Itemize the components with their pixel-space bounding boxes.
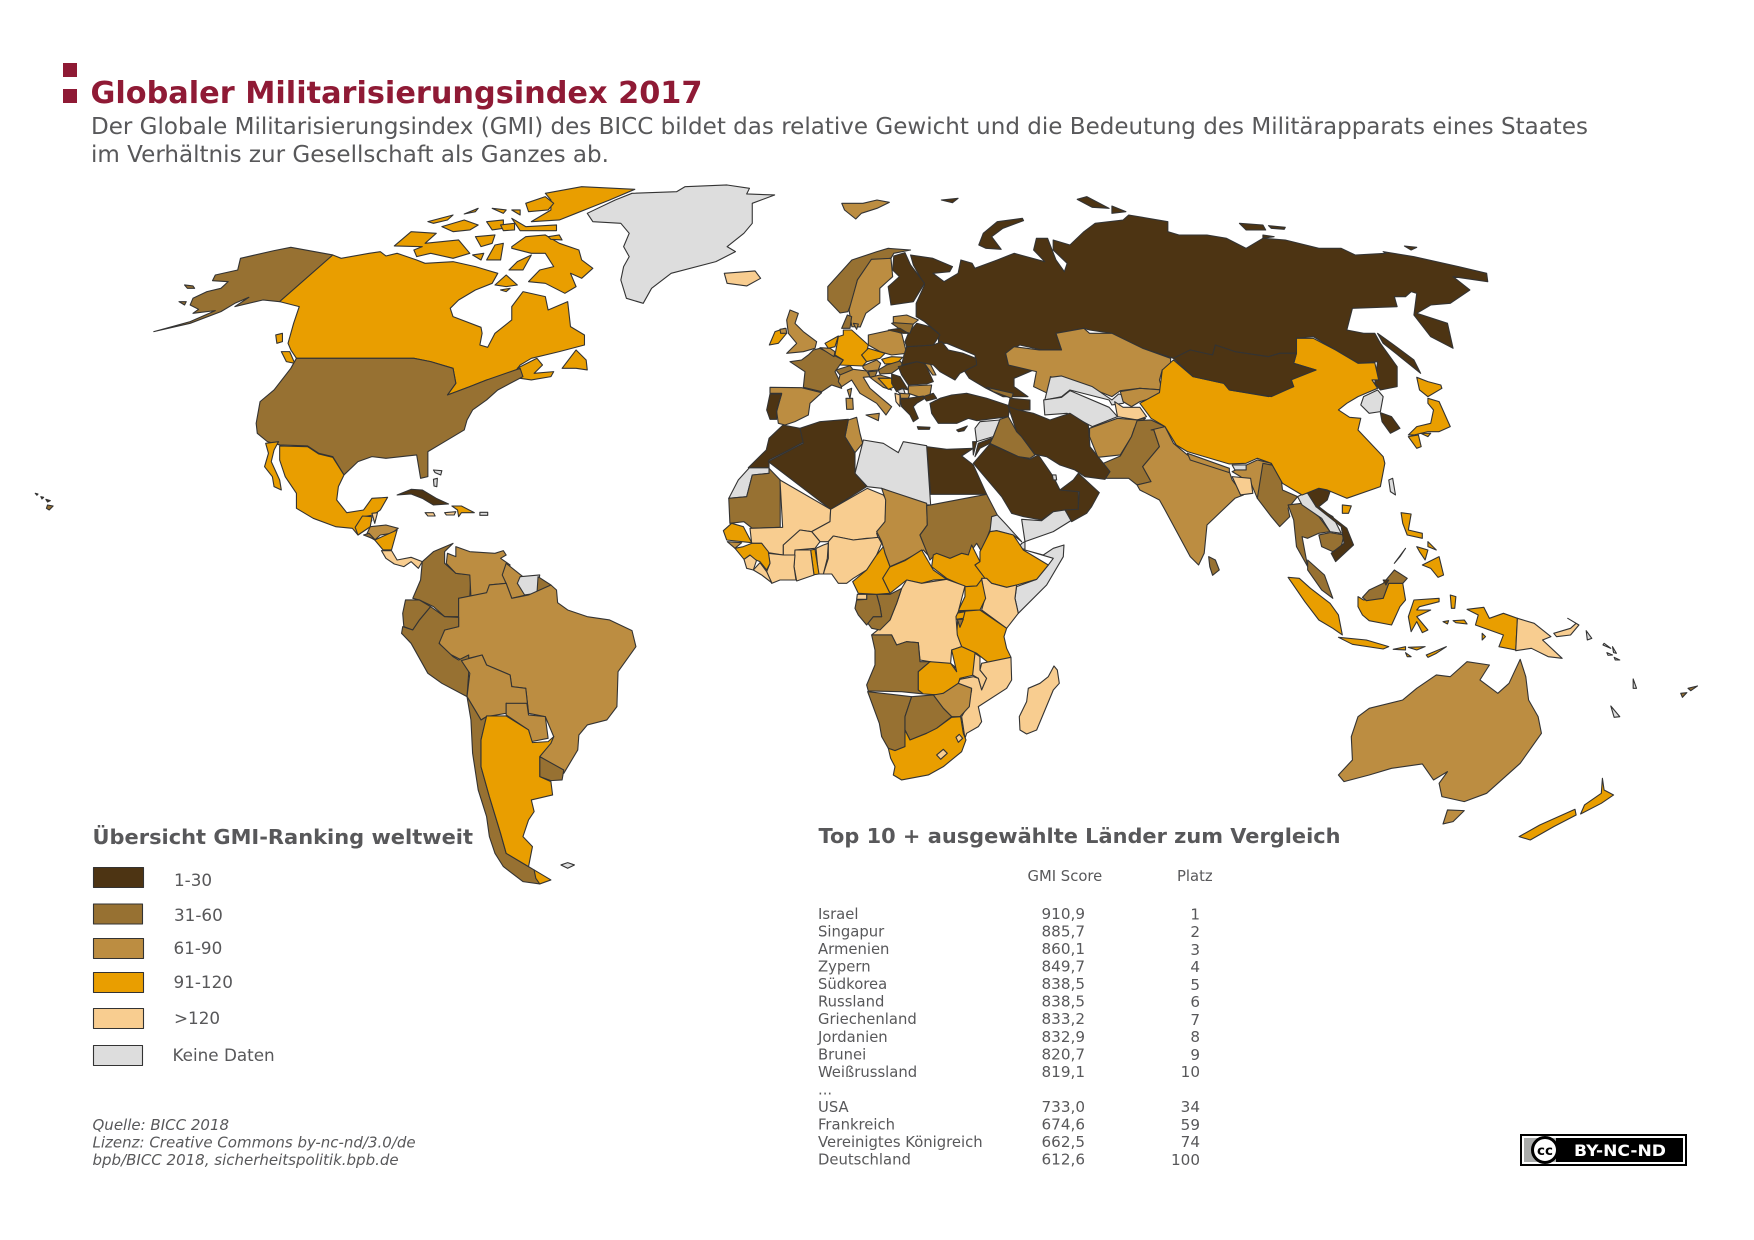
icon: title squares — [63, 63, 77, 103]
legend item: 61-90 — [94, 938, 222, 958]
source note — [92, 1116, 416, 1169]
title block — [63, 63, 1588, 168]
table rows: Südkorea — [818, 976, 887, 993]
Russia, Asia — [828, 197, 1488, 567]
legend item: 61-90: 61-90 — [174, 938, 222, 958]
table rows: 74 — [1181, 1133, 1200, 1151]
subtitle — [91, 112, 1588, 168]
table rows: 838,5 — [1042, 992, 1085, 1010]
table rows: 5 — [1190, 976, 1200, 994]
legend item: 31-60: 31-60 — [174, 905, 223, 925]
table rows: Weißrussland — [818, 1064, 917, 1081]
table rows: 662,5 — [1042, 1133, 1085, 1151]
table rows: 833,2 — [1042, 1010, 1085, 1028]
table column headers: Platz — [1177, 868, 1213, 885]
source note: Lizenz: Creative Commons by-nc-nd/3.0/de — [92, 1134, 416, 1152]
title: Globaler Militarisierungsindex 2017 — [90, 76, 702, 111]
table rows: Russland — [818, 994, 884, 1010]
table rows: 100 — [1171, 1151, 1200, 1169]
table rows: 1 — [1190, 906, 1200, 924]
Southeast Asia and Oceania — [1209, 513, 1697, 840]
North America and Greenland — [154, 185, 775, 478]
panel: legend — [92, 825, 473, 1066]
source note: bpb/BICC 2018, sicherheitspolitik.bpb.de — [92, 1151, 399, 1169]
table rows: 674,6 — [1042, 1116, 1085, 1134]
table rows: Frankreich — [818, 1116, 895, 1134]
subtitle: Der Globale Militarisierungsindex (GMI) des BICC bildet das relative Gewicht und die Bedeutung des Militärapparats eines Staates — [91, 112, 1588, 140]
table rows: 4 — [1190, 958, 1200, 976]
table rows: 59 — [1181, 1116, 1200, 1134]
table rows: 819,1 — [1042, 1063, 1085, 1081]
legend item: 1-30: 1-30 — [174, 870, 212, 890]
icon: CC BY-NC-ND badge — [1520, 1134, 1687, 1166]
table rows: 6 — [1190, 993, 1200, 1011]
legend item: 1-30 — [94, 868, 212, 890]
table rows: 9 — [1190, 1046, 1200, 1064]
table rows: Griechenland — [818, 1011, 917, 1028]
table rows: Deutschland — [818, 1152, 911, 1168]
legend item: 31-60 — [94, 904, 223, 925]
Latin America — [35, 425, 804, 884]
table rows: 910,9 — [1042, 905, 1085, 923]
legend item: 91-120: 91-120 — [174, 972, 233, 992]
table rows: 8 — [1190, 1028, 1200, 1046]
icon: CC BY-NC-ND badge: cc — [1537, 1143, 1553, 1159]
table rows: Brunei — [818, 1046, 866, 1064]
legend item: >120 — [94, 1008, 220, 1028]
panel: top 10 table — [817, 824, 1340, 1169]
table rows: 885,7 — [1042, 922, 1085, 940]
table rows: 10 — [1181, 1063, 1200, 1081]
table rows: 838,5 — [1042, 975, 1085, 993]
table rows: ... — [818, 1082, 832, 1098]
table rows: Armenien — [818, 941, 889, 958]
table rows: 860,1 — [1042, 940, 1085, 958]
table heading: Top 10 + ausgewählte Länder zum Vergleich — [818, 824, 1340, 848]
table rows: Jordanien — [817, 1029, 888, 1046]
table rows: 2 — [1190, 923, 1200, 941]
subtitle: im Verhältnis zur Gesellschaft als Ganzes ab. — [91, 140, 609, 168]
table rows: 7 — [1190, 1011, 1200, 1029]
legend heading: Übersicht GMI-Ranking weltweit — [92, 825, 473, 849]
legend item: Keine Daten: Keine Daten — [172, 1045, 275, 1065]
table rows: Vereinigtes Königreich — [818, 1134, 983, 1151]
Europe and Middle East — [767, 310, 1110, 542]
table rows: 612,6 — [1042, 1150, 1085, 1168]
icon: CC BY-NC-ND badge: BY-NC-ND — [1574, 1141, 1666, 1160]
legend item: Keine Daten — [94, 1045, 275, 1066]
table rows: 34 — [1181, 1098, 1200, 1116]
table rows: Singapur — [818, 924, 885, 940]
table rows — [817, 905, 1200, 1169]
table column headers — [1028, 868, 1213, 885]
world map — [35, 185, 1697, 884]
table rows: 832,9 — [1042, 1028, 1085, 1046]
Africa — [723, 480, 1064, 780]
legend item: >120: >120 — [174, 1008, 220, 1028]
table rows: USA — [818, 1099, 849, 1116]
legend item: 91-120 — [94, 972, 233, 992]
table rows: 849,7 — [1042, 958, 1085, 976]
table rows: 3 — [1190, 941, 1200, 959]
table column headers: GMI Score — [1028, 868, 1102, 885]
table rows: Israel — [818, 906, 858, 923]
table rows: 733,0 — [1042, 1098, 1085, 1116]
source note: Quelle: BICC 2018 — [92, 1116, 229, 1134]
table rows: 820,7 — [1042, 1046, 1085, 1064]
table rows: Zypern — [818, 958, 871, 976]
